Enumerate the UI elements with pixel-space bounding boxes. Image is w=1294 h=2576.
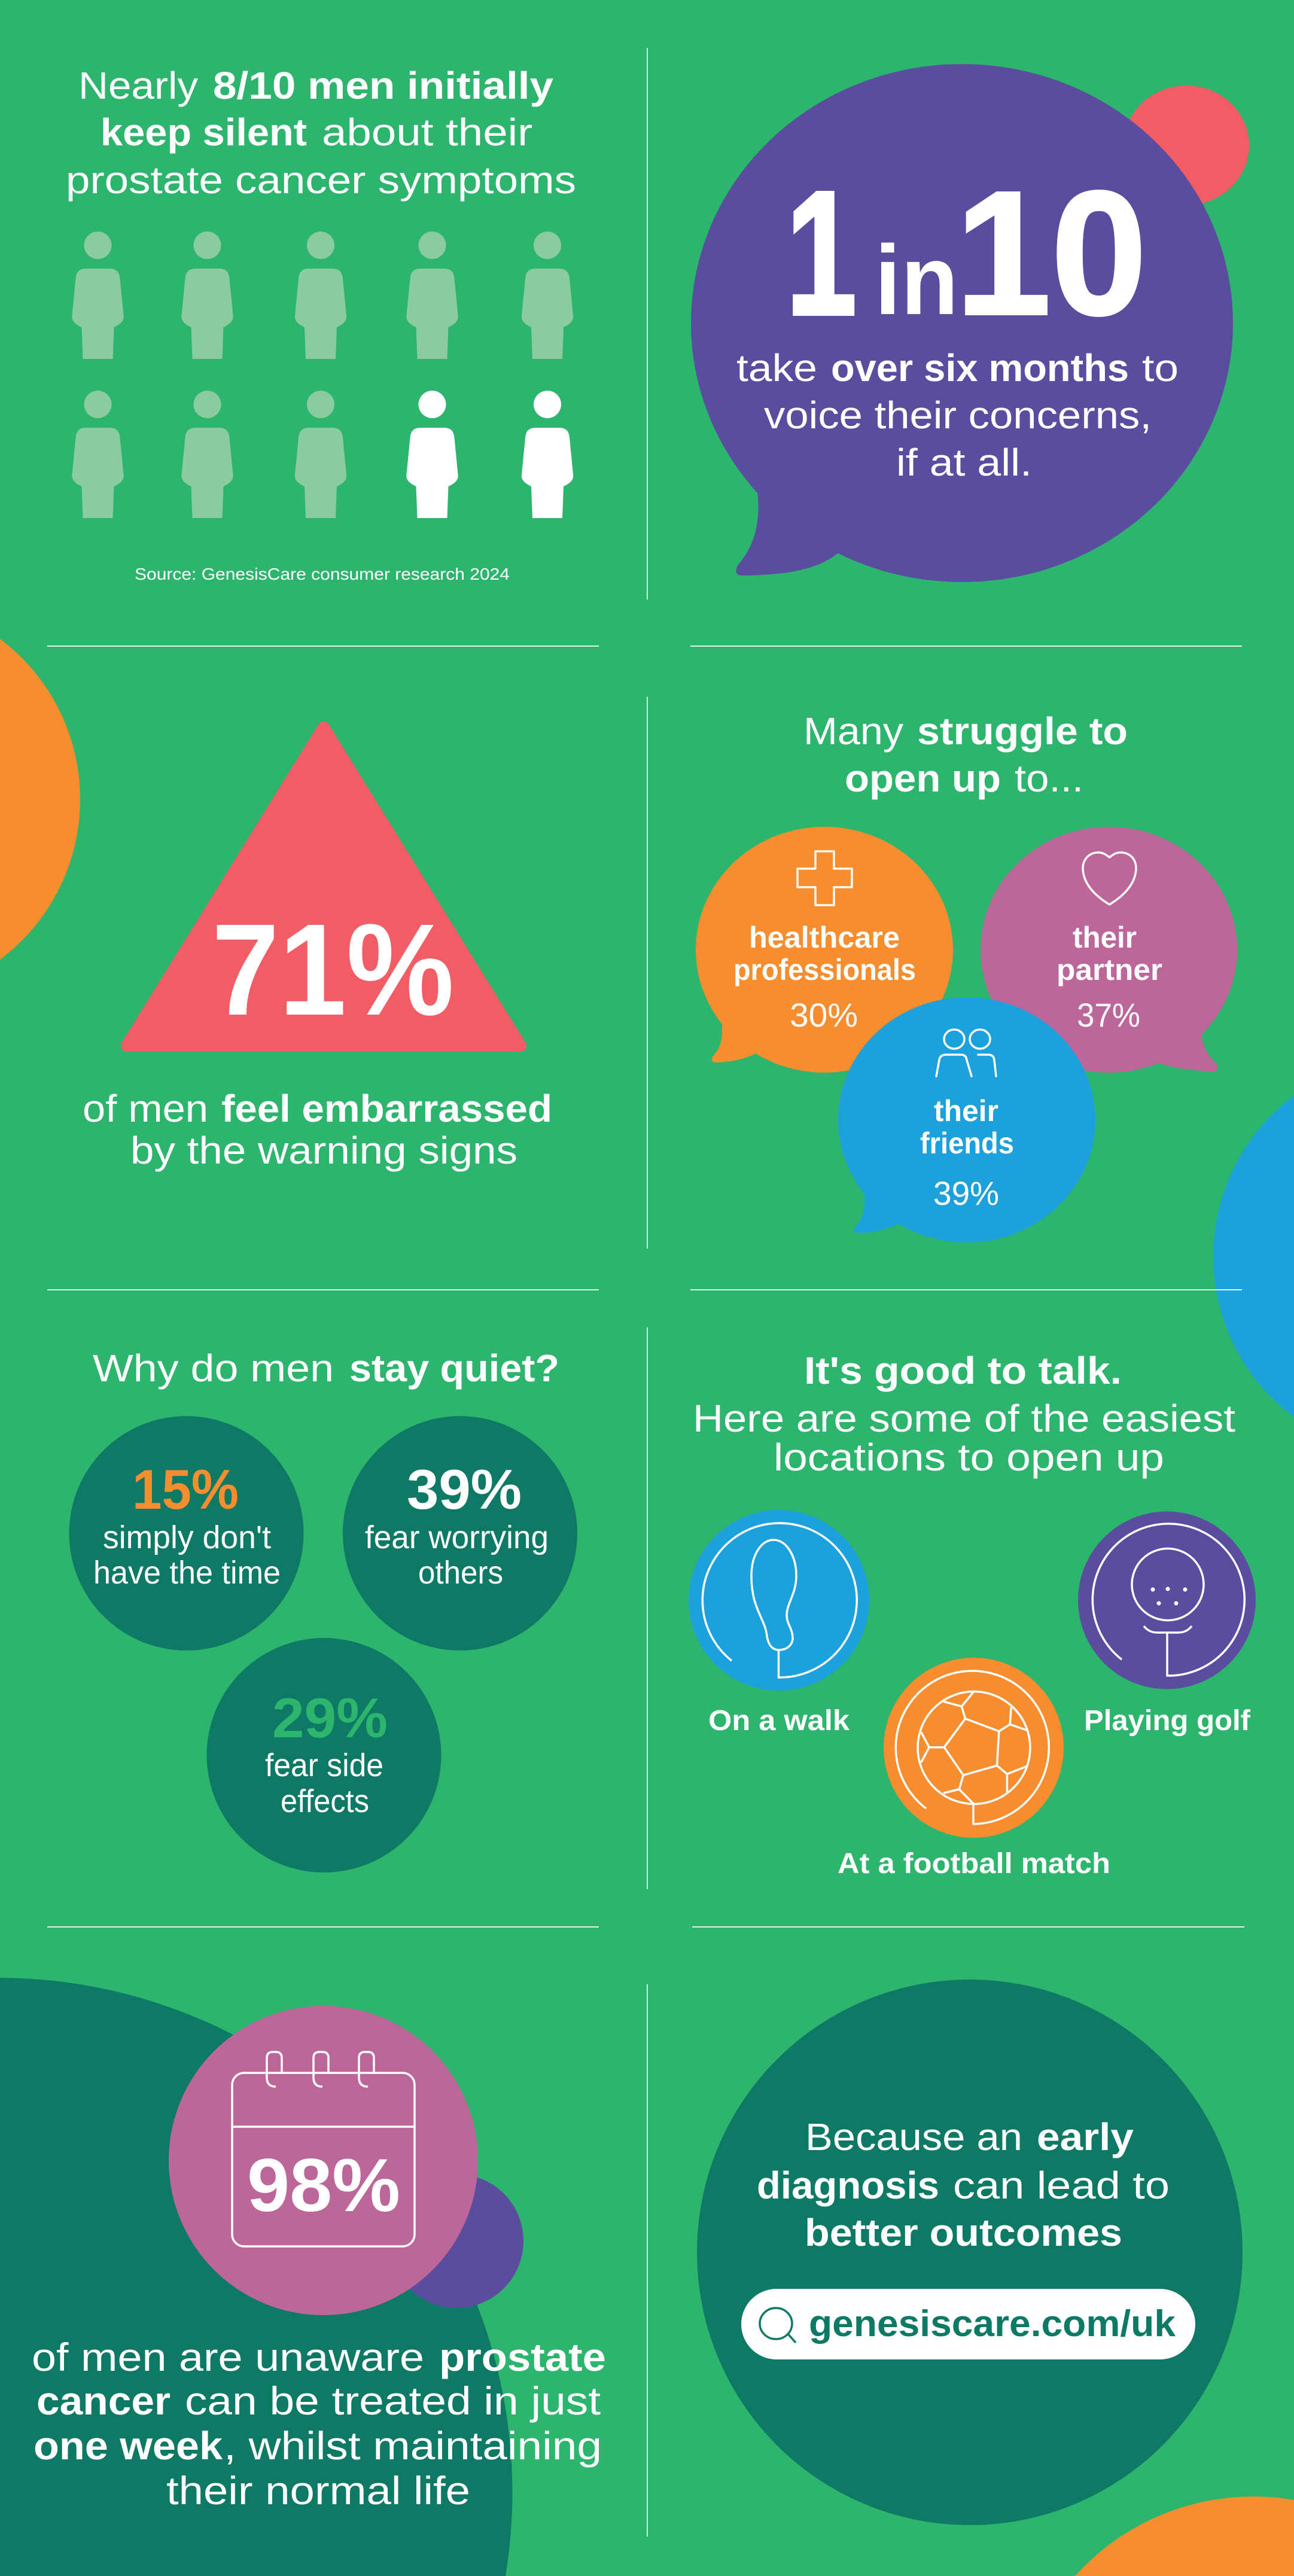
speech bubble: their partner 37% <box>981 827 1237 1073</box>
label: at a football match: At a football match <box>838 1848 1110 1880</box>
statistic: 1 in 10 <box>786 154 1147 352</box>
text: take over six months: to <box>1142 346 1179 389</box>
speech bubble: their partner 37%: partner <box>1056 953 1162 986</box>
text: because an early diagnosis <box>757 2115 1170 2254</box>
text: because an early diagnosis: diagnosis <box>757 2164 939 2207</box>
heading: many struggle to open up <box>803 710 1128 800</box>
icon: heart <box>1083 852 1136 905</box>
panel: why do men stay quiet <box>69 1347 577 1872</box>
statistic: 1 in 10: in <box>875 225 958 335</box>
circle: 15% no time: have the time <box>93 1555 281 1591</box>
panel: good to talk locations <box>689 1349 1256 1880</box>
circle: 29% side effects: effects <box>281 1783 369 1819</box>
speech bubble: their friends 39%: friends <box>920 1126 1014 1160</box>
decorative red circle behind bubble <box>1124 86 1249 205</box>
speech bubble: healthcare professionals 30%: 30% <box>790 996 858 1034</box>
decorative purple circle <box>389 2174 523 2308</box>
heading: nearly 8/10 men: prostate cancer symptoms <box>66 159 576 202</box>
speech bubble: their friends 39% <box>838 997 1095 1243</box>
icon: magnifying glass <box>760 2308 796 2343</box>
circle: 15% no time: simply don't <box>103 1520 271 1555</box>
speech bubble: their partner 37%: their <box>1073 921 1137 954</box>
text: take over six months: if at all. <box>896 441 1032 484</box>
circle: 39% worrying others: 39% <box>407 1458 522 1521</box>
panel: 8 in 10 men keep silent <box>66 64 576 583</box>
text: of men are unaware: , whilst maintaining <box>224 2423 602 2468</box>
circle: 39% worrying others <box>343 1416 577 1651</box>
background shape: orange circle bottom right <box>1075 2496 1294 2576</box>
heading: nearly 8/10 men: about their <box>322 111 532 154</box>
text: because an early diagnosis: better outcomes <box>805 2211 1122 2254</box>
statistic: 1 in 10: 1 <box>786 154 857 352</box>
pictogram: ten people, two highlighted <box>72 232 573 518</box>
heading: it's good to talk: locations to open up <box>774 1436 1164 1479</box>
icon: medical cross <box>797 851 852 905</box>
text: of men feel embarrassed: by the warning signs <box>130 1129 517 1172</box>
circle: 15% no time: 15% <box>132 1458 239 1521</box>
circle: 29% side effects: 29% <box>272 1686 388 1749</box>
background shape: orange circle left <box>0 639 80 960</box>
text: of men are unaware: cancer <box>36 2379 170 2423</box>
red triangle <box>127 727 520 1046</box>
statistic: 98%: 98% <box>247 2144 400 2227</box>
text: of men are unaware: their normal life <box>166 2468 470 2513</box>
text: of men feel embarrassed <box>83 1087 552 1172</box>
icon: football <box>884 1658 1064 1838</box>
text: of men feel embarrassed: of men <box>83 1087 208 1130</box>
heading: many struggle to open up: to... <box>1015 757 1083 800</box>
text: because an early diagnosis: can lead to <box>953 2164 1170 2207</box>
text: of men are unaware: one week <box>34 2423 223 2468</box>
panel: early diagnosis call to action <box>697 1980 1243 2525</box>
icon: golf ball on tee <box>1078 1511 1256 1689</box>
heading: nearly 8/10 men <box>66 64 576 202</box>
text: of men are unaware: can be treated in just <box>185 2379 601 2423</box>
speech bubble: their partner 37%: 37% <box>1077 996 1140 1034</box>
speech bubble: their friends 39%: their <box>934 1094 998 1128</box>
text: because an early diagnosis: Because an <box>805 2115 1022 2158</box>
heading: many struggle to open up: struggle to <box>917 710 1128 753</box>
heading: nearly 8/10 men: 8/10 men initially <box>213 64 553 107</box>
speech bubble: healthcare professionals 30% <box>696 827 953 1073</box>
panel: 1 in 10 speech bubble <box>691 64 1249 582</box>
circle: 29% side effects <box>207 1638 442 1872</box>
search pill: genesiscare.com/uk: genesiscare.com/uk <box>809 2303 1176 2344</box>
background dark circle <box>0 1978 512 2576</box>
circle: 39% worrying others: fear worrying <box>365 1520 549 1555</box>
text: because an early diagnosis: early <box>1037 2115 1134 2158</box>
pink circle <box>169 2006 478 2315</box>
text: of men are unaware: of men are unaware <box>32 2335 424 2379</box>
heading: it's good to talk <box>693 1349 1235 1479</box>
heading: it's good to talk: Here are some of the easiest <box>693 1397 1235 1440</box>
panel: many struggle to open up <box>696 710 1237 1243</box>
text: of men feel embarrassed: feel embarrassed <box>221 1087 552 1130</box>
heading: it's good to talk: It's good to talk. <box>804 1349 1122 1392</box>
circle: 15% no time <box>69 1416 304 1651</box>
search pill: genesiscare.com/uk <box>741 2289 1195 2359</box>
heading: nearly 8/10 men: Nearly <box>78 64 198 107</box>
circle: 39% worrying others: others <box>418 1555 503 1591</box>
text: take over six months: over six months <box>831 346 1129 389</box>
heading: why do men stay quiet: stay quiet? <box>349 1347 559 1390</box>
dark green circle <box>697 1980 1243 2525</box>
speech bubble: healthcare professionals 30%: healthcare <box>749 921 900 954</box>
text: take over six months: voice their concerns, <box>764 394 1152 437</box>
label: on a walk: On a walk <box>708 1705 850 1737</box>
speech bubble: their friends 39%: 39% <box>933 1174 999 1212</box>
speech bubble: healthcare professionals 30%: professionals <box>733 953 916 986</box>
purple speech bubble <box>691 64 1233 582</box>
icon: calendar <box>232 2052 415 2246</box>
heading: why do men stay quiet: Why do men <box>93 1347 334 1390</box>
heading: many struggle to open up: Many <box>803 710 903 753</box>
text: of men are unaware: prostate <box>439 2335 606 2379</box>
statistic: 1 in 10: 10 <box>955 154 1147 352</box>
source note: Source: GenesisCare consumer research 2024 <box>135 565 510 583</box>
text: take over six months: take <box>736 346 817 389</box>
label: playing golf: Playing golf <box>1084 1705 1251 1737</box>
circle: 29% side effects: fear side <box>265 1747 383 1783</box>
panel: 71% embarrassed <box>83 727 552 1172</box>
heading: why do men stay quiet <box>93 1347 559 1390</box>
heading: nearly 8/10 men: keep silent <box>101 111 307 154</box>
heading: many struggle to open up: open up <box>845 757 1001 800</box>
statistic: 71%: 71% <box>212 897 454 1043</box>
text: of men are unaware <box>32 2335 606 2513</box>
text: take over six months <box>736 346 1179 484</box>
icon: footprint on a walk <box>689 1510 869 1691</box>
icon: two people <box>936 1030 996 1076</box>
panel: 98% unaware <box>0 1978 606 2576</box>
background shape: blue circle right <box>1213 1095 1294 1417</box>
